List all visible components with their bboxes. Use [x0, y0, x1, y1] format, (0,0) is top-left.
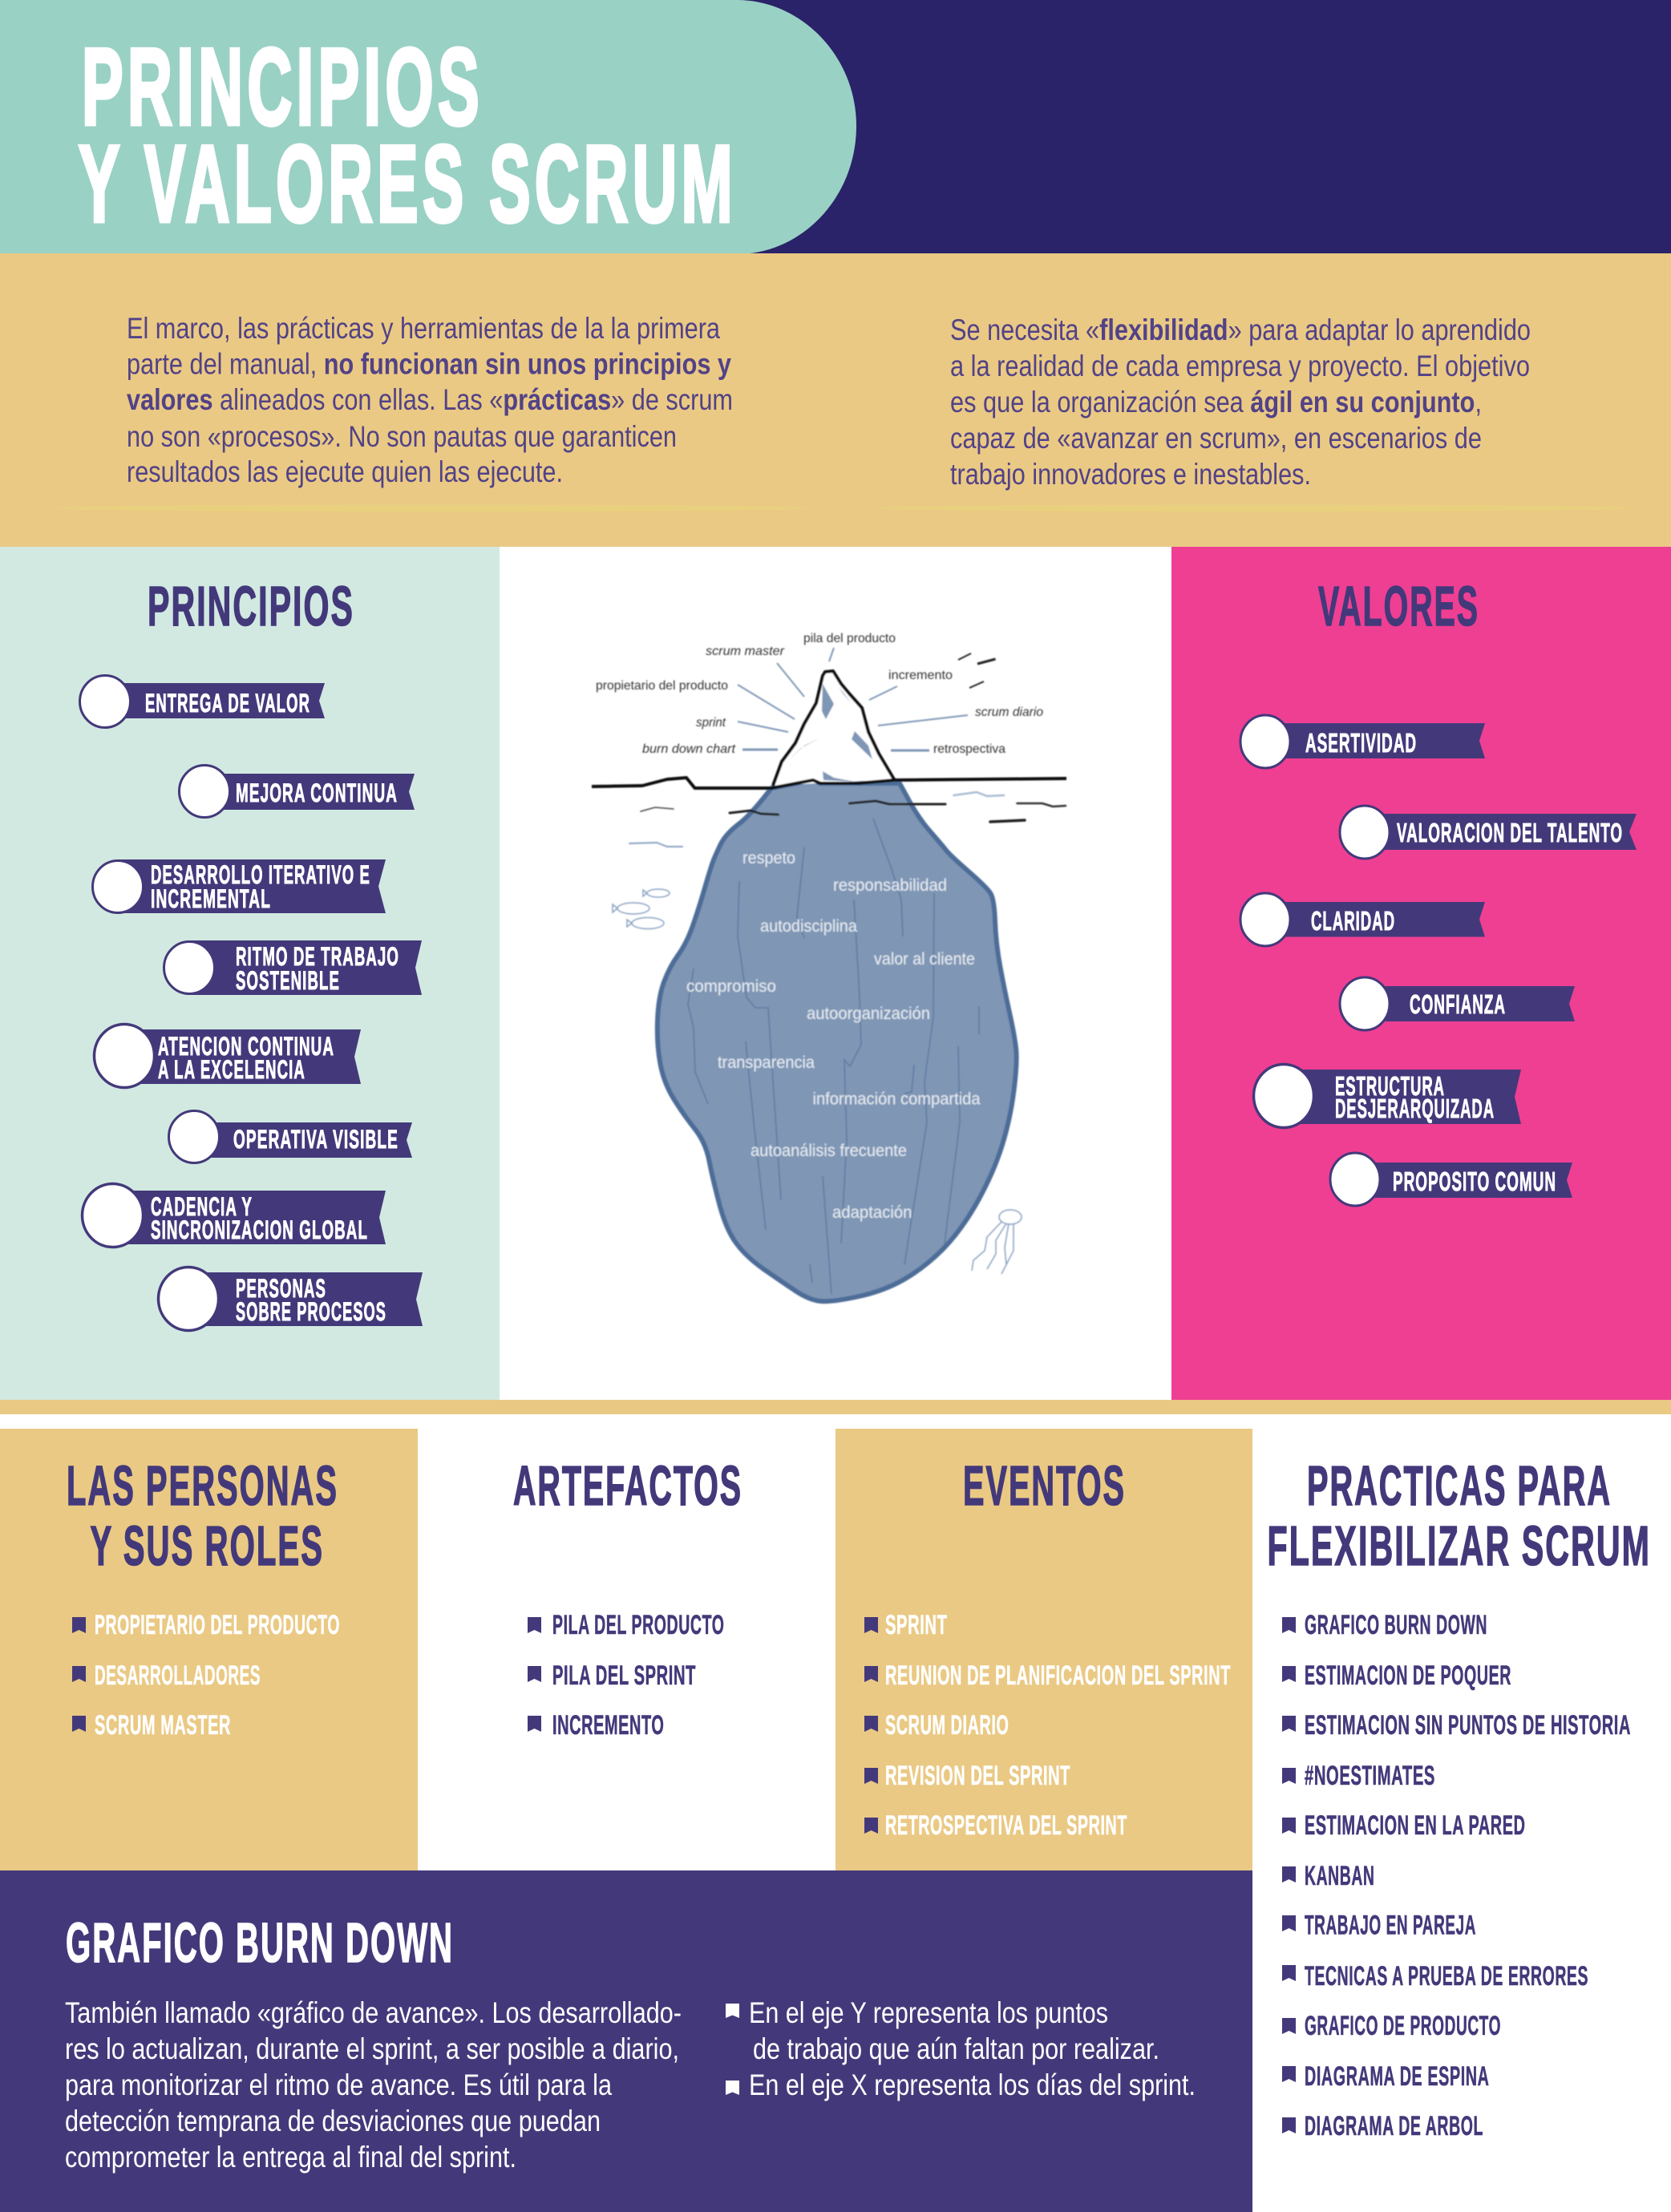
panel: las personas y sus roles	[0, 1429, 418, 1871]
title: PRINCIPIOS	[82, 26, 483, 148]
text block: right intro: trabajo innovadores e inestables.	[950, 458, 1311, 491]
badge: desarrollo iterativo: DESARROLLO ITERATIVO E	[151, 860, 370, 889]
badge: claridad	[1240, 893, 1485, 946]
text block: description: comprometer la entrega al final del sprint.	[65, 2141, 516, 2174]
iceberg tip	[773, 671, 894, 786]
panel: artefactos	[513, 1454, 742, 1741]
badge: entrega de valor: ENTREGA DE VALOR	[145, 689, 310, 718]
band between sections	[0, 1400, 1671, 1414]
list: practicas: DIAGRAMA DE ESPINA	[1305, 2061, 1490, 2092]
submerged labels: transparencia	[718, 1053, 815, 1072]
badge: confianza: CONFIANZA	[1410, 989, 1506, 1019]
pointer lines	[738, 648, 968, 750]
list: practicas: KANBAN	[1305, 1861, 1374, 1891]
heading: principios: PRINCIPIOS	[148, 575, 354, 637]
panel: eventos	[836, 1429, 1252, 1871]
fish	[613, 889, 670, 928]
badge: estructura desjerarquizada	[1254, 1065, 1521, 1127]
badge: claridad: CLARIDAD	[1311, 906, 1395, 936]
text block: right intro: a la realidad de cada empresa y proyecto. El objetivo	[950, 350, 1530, 382]
badge: estructura desjerarquizada: ESTRUCTURA	[1335, 1071, 1445, 1101]
text block: axes: En el eje Y representa los puntos	[749, 1996, 1108, 2029]
badge: atencion continua: ATENCION CONTINUA	[158, 1032, 334, 1061]
text block: axes: En el eje X representa los días del sprint.	[749, 2068, 1196, 2101]
title	[79, 26, 737, 245]
submerged labels: adaptación	[832, 1203, 912, 1222]
submerged labels: respeto	[742, 849, 795, 867]
badge: cadencia: SINCRONIZACION GLOBAL	[151, 1215, 368, 1244]
badge: personas: SOBRE PROCESOS	[236, 1297, 386, 1326]
panel: grafico burn down	[0, 1870, 1252, 2212]
badge: ritmo de trabajo: RITMO DE TRABAJO	[236, 942, 399, 971]
tip labels: propietario del producto	[596, 679, 728, 693]
panel: valores	[1171, 547, 1671, 1401]
jellyfish	[972, 1210, 1022, 1274]
list: practicas: TRABAJO EN PAREJA	[1305, 1910, 1476, 1940]
submerged labels: responsabilidad	[833, 876, 947, 895]
heading: grafico burn down: GRAFICO BURN DOWN	[66, 1911, 454, 1974]
list: practicas	[1282, 1610, 1631, 2141]
list: roles: SCRUM MASTER	[95, 1710, 231, 1741]
badge: atencion continua	[95, 1025, 361, 1087]
list: artefactos	[528, 1610, 725, 1741]
heading: las personas: Y SUS ROLES	[90, 1514, 324, 1577]
panel: principios	[0, 547, 500, 1401]
iceberg crevasses	[688, 819, 979, 1294]
badge: personas	[159, 1267, 423, 1331]
heading: practicas	[1267, 1454, 1651, 1577]
list: artefactos: INCREMENTO	[552, 1710, 664, 1741]
text block: description: detección temprana de desviaciones que puedan	[65, 2105, 601, 2137]
tip labels: scrum master	[706, 645, 785, 658]
list: practicas: GRAFICO DE PRODUCTO	[1305, 2011, 1501, 2041]
heading: artefactos: ARTEFACTOS	[513, 1454, 742, 1517]
badge: asertividad	[1240, 715, 1485, 768]
badge: ritmo de trabajo: SOSTENIBLE	[236, 966, 340, 995]
heading: eventos: EVENTOS	[963, 1454, 1126, 1517]
text block: right intro	[950, 313, 1531, 491]
submerged labels: autodisciplina	[760, 917, 857, 936]
heading: valores: VALORES	[1318, 575, 1479, 637]
badge: desarrollo iterativo: INCREMENTAL	[151, 884, 271, 913]
list: eventos: REUNION DE PLANIFICACION DEL SPRINT	[885, 1660, 1231, 1691]
text block: left intro: resultados las ejecute quien las ejecute.	[127, 455, 563, 488]
text block: description: También llamado «gráfico de avance». Los desarrollado-	[65, 1996, 682, 2029]
tip shading	[789, 684, 872, 782]
submerged labels: autoorganización	[807, 1005, 930, 1023]
tip labels: scrum diario	[975, 706, 1043, 719]
heading: las personas	[67, 1454, 338, 1577]
list: practicas: #NOESTIMATES	[1305, 1761, 1435, 1791]
text block: right intro: Se necesita «flexibilidad» para adaptar lo aprendido	[950, 313, 1531, 346]
submerged labels: compromiso	[686, 977, 776, 996]
badge: valoracion del talento	[1340, 806, 1637, 859]
list: artefactos: PILA DEL SPRINT	[552, 1660, 696, 1691]
badge: personas: PERSONAS	[236, 1274, 326, 1303]
list: practicas: ESTIMACION DE POQUER	[1305, 1660, 1511, 1691]
submerged labels: información compartida	[813, 1090, 981, 1108]
submerged labels: autoanálisis frecuente	[751, 1142, 907, 1160]
list: roles: PROPIETARIO DEL PRODUCTO	[95, 1610, 340, 1640]
birds	[958, 653, 996, 688]
tip labels: incremento	[888, 669, 953, 682]
list: artefactos: PILA DEL PRODUCTO	[552, 1610, 725, 1640]
text block: axes	[726, 1996, 1196, 2101]
badge: confianza	[1340, 977, 1575, 1030]
header band	[0, 0, 1671, 254]
panel: practicas para flexibilizar scrum	[1267, 1454, 1651, 2141]
waterline	[592, 778, 1066, 788]
tip labels: sprint	[696, 716, 726, 730]
text block: description	[65, 1996, 682, 2174]
badge: entrega de valor	[80, 675, 325, 728]
list: roles: DESARROLLADORES	[95, 1660, 261, 1691]
list: eventos: REVISION DEL SPRINT	[885, 1761, 1070, 1791]
tip labels: pila del producto	[803, 632, 896, 645]
badge: proposito comun: PROPOSITO COMUN	[1393, 1167, 1556, 1196]
list: practicas: GRAFICO BURN DOWN	[1305, 1610, 1487, 1640]
text block: right intro: capaz de «avanzar en scrum», en escenarios de	[950, 422, 1482, 455]
list: eventos: SCRUM DIARIO	[885, 1710, 1009, 1741]
tip labels	[596, 632, 1043, 756]
chart: iceberg	[592, 632, 1066, 1301]
text block: axes: de trabajo que aún faltan por realizar.	[753, 2032, 1159, 2065]
submerged labels: valor al cliente	[874, 950, 975, 969]
text block: left intro: valores alineados con ellas. Las «prácticas» de scrum	[127, 383, 733, 416]
badge: cadencia	[82, 1183, 386, 1248]
panel: introduction	[0, 253, 1671, 547]
heading: las personas: LAS PERSONAS	[67, 1454, 338, 1517]
text block: left intro: no son «procesos». No son pautas que garanticen	[127, 420, 677, 453]
text block: left intro: parte del manual, no funcionan sin unos principios y	[127, 348, 731, 380]
waves	[629, 792, 1066, 847]
badge: proposito comun	[1330, 1153, 1572, 1206]
badge: ritmo de trabajo	[164, 940, 422, 995]
tip labels: retrospectiva	[933, 742, 1005, 756]
badge: estructura desjerarquizada: DESJERARQUIZADA	[1335, 1094, 1495, 1123]
iceberg body	[657, 780, 1017, 1301]
badge: operativa visible	[168, 1111, 412, 1163]
badge: mejora continua	[180, 765, 415, 818]
list: eventos: SPRINT	[885, 1610, 948, 1640]
text block: left intro	[127, 312, 733, 488]
text block: left intro: El marco, las prácticas y herramientas de la la primera	[127, 312, 720, 345]
badge: operativa visible: OPERATIVA VISIBLE	[233, 1125, 399, 1154]
badge: asertividad: ASERTIVIDAD	[1305, 728, 1417, 758]
text block: right intro: es que la organización sea ágil en su conjunto,	[950, 386, 1482, 419]
text block: description: res lo actualizan, durante el sprint, a ser posible a diario,	[65, 2032, 679, 2065]
text block: description: para monitorizar el ritmo de avance. Es útil para la	[65, 2068, 612, 2101]
badge: desarrollo iterativo	[93, 859, 386, 913]
badge: mejora continua: MEJORA CONTINUA	[236, 778, 398, 807]
badge: cadencia: CADENCIA Y	[151, 1192, 253, 1221]
list: eventos: RETROSPECTIVA DEL SPRINT	[885, 1810, 1127, 1841]
badge: atencion continua: A LA EXCELENCIA	[158, 1055, 305, 1084]
list: roles	[72, 1610, 340, 1741]
tip labels: burn down chart	[642, 742, 736, 756]
title: Y VALORES SCRUM	[79, 123, 737, 245]
list: eventos	[864, 1610, 1231, 1841]
list: practicas: DIAGRAMA DE ARBOL	[1305, 2111, 1483, 2141]
submerged labels	[686, 849, 981, 1222]
